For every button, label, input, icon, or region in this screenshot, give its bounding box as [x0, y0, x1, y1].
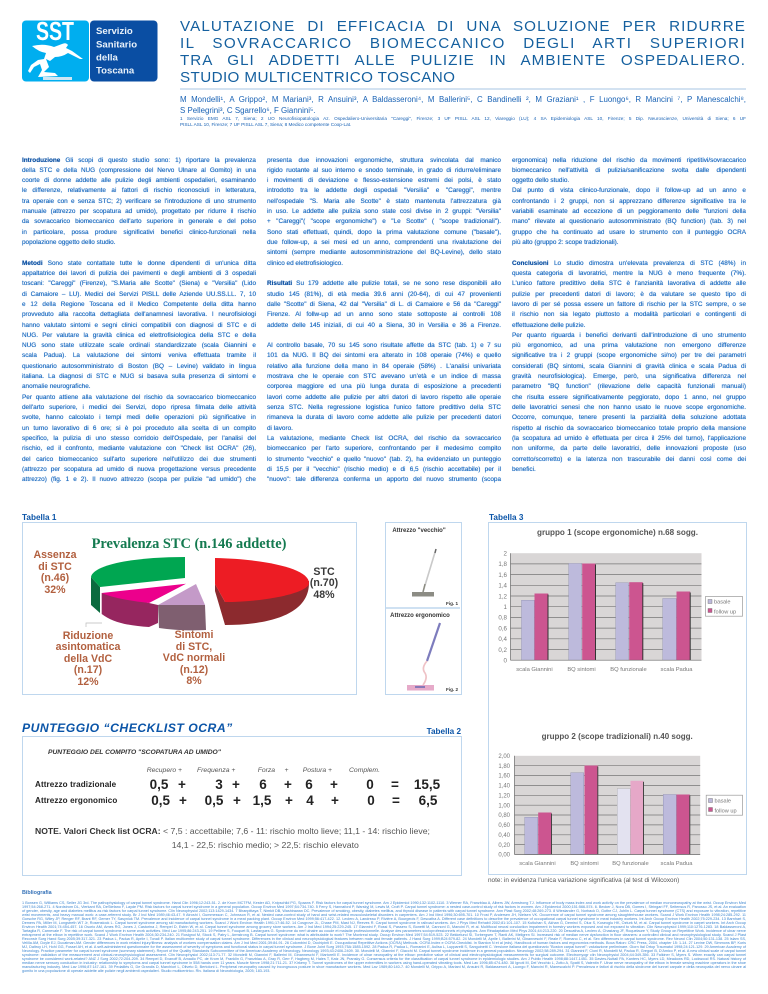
text block: bibliography: 1 Bonsen G, Williams CS, Seiler JG 3rd. The pathophysiology of carpal tunnel syndrome. Hand Clin 1996;12:243-51. 2. de Krom MCTFM, Kester AD, Knipschild PG, Spaans F. Risk factors for carpal tunnel syndrome. Am J Epidemiol 1990;132:1102-1110. 3 Werner RA, Franzblau A, Albers JW, Armstrong TJ. Influence of body mass index and work activity on the prevalence of median mononeuropathy at the wrist. Occup Environ Med 1997;54:268-271. 4 Nordstrom DL, Vierkant RA, DeStefano F, Layde PM. Risk factors for carpal tunnel syndrome in a general population. Occup Environ Med 1997;54:734-740. 5 Ferry S, Hannaford P, Warskyj M, Lewis M, Croft P. Carpal tunnel syndrome: a nested case-control study of risk factors in women. Am J Epidemiol 2000;151:566-574. 6. Becker J, Nora DB, Gomes I, Stringari FF, Seitensus R, Panosso JS, et al. An evaluation of gender, obesity, age and diabetes mellitus as risk factors for carpal tunnel syndrome. Clin Neurophysiol 2002;113:1429-1434. 7 Bhanpittaya T, Nimkit DB, Washirawan DC. Prevalence of smoking, obesity, diabetes mellitus, and thyroid disease in patients with carpal tunnel syndrome. Ann Plast Surg 2002;48:269-273. 8 Wieslander G, Norback D, Gothe CJ, Juhlin L. Carpal tunnel syndrome (CTS) and exposure to vibration, repetitive wrist movements, and heavy manual work: a case-referent study. Br J Ind Med 1989;46:43-47. 9 Atroshi I, Gummesson C, Johnsson R, et al. Nested case-control study of hand and wrist-related musculoskeletal disorders in carpenters. Am J Ind Med 1996;30:695-701. 10 Frost P, Andersen JH, Nielsen VK. Occurrence of carpal tunnel syndrome among slaughterhouse workers. Scand J Work Environ Health 1998;24:285-292. 11 Gorsche RG, Wiley JP, Renger RF, Brant RF, Gemer TY, Sasyniuk TM. Prevalence and incidence of carpal tunnel syndrome in a meat packing plant. Occup Environ Med 1999;56:417-422. 12. Leclerc A, Landreau P, Rivière A, Bourgeois F, Descatha A. Different case definitions to describe the prevalence of occupational carpal tunnel syndrome in meat industry workers. Int Arch Occup Environ Health 2002;75:229-234. 13 Barnhart S, Demers PA, Miller M, Longstreth WT Jr, Rosenstock L. Carpal tunnel syndrome among ski manufacturing workers. Scand J Work Environ Health 1991;17:46-52. 14 Cosgrove JL, Chase PM, Mast NJ, Reeves R. Carpal tunnel syndrome in railroad workers. Am J Phys Med Rehabil 2002;81:101-107. 15 Kutluhan S, Akhan G, Demirci S, Oluz S, Koseoglu HK, Ozturk M, et al. Carpal tunnel syndrome in carpet workers. Int Arch Occup Environ Health 2001;74:454-457. 16 Osorio AM, Ames RG, Jones J, Castorina J, Rempel D, Estrin W, et al. Carpal tunnel syndrome among grocery store workers. Am J Ind Med 1994;25:229-245. 17 Giannini F, Rossi S, Passero S, Bonetti M, Cannoni G, Mancini R, et al. Multifocal neural conduction impairment in forestry workers exposed and not exposed to vibration. Clin Neurophysiol 1999;110:1276-1283. 18 Baldasseroni A, Tartaglia R, Carnevale F. The risk of carpal tunnel syndrome in some work activities. Med Lav 1995;86:243-251. 19 Pelliere S, Fouquet B, Lasfargues G. Syndrome du nerf ulnaire au coude et maladie professionnelle. Analyse des parametres socioprofessionnels et physiques. Ann Réadaptation Méd Phys 2001;44:213-220. 20 Descatha A, Leclerc A, Chastang JF, Roquelaure Y, Study Group on Repetitive Work. Incidence of ulnar nerve entrapment at the elbow in repetitive work. Scand J Work Environ Health 2004;30:234-240. 21 Rosignol M, Stock S, Patry L, Armstrong B. Carpal tunnel syndrome: what is attributable to work? The Montreal study. Occup Environ Med 1997;54:519-523. 22 Bekkelund SI, Torbergsen T, Ranti AK, Mellgren SI. Increased risk of median nerve dysfunction in floor cleaners: a controlled clinical and neurophysiological study. Scand J Plast Reconstr Surg Hand Surg 2005;39:317-321. 23 Padua L, Padua R, Aprile I, Tonali P. Italian multicentre study of carpal tunnel syndrome. Differences in the clinical and neurophysiological features between male and female patie — [22, 901, 746, 973]
chart: gruppo 2: 1,60 — [498, 774, 511, 780]
text column 2: risultati: due follow-up, a sei mesi ed un anno, comprendenti una rivalutazione dei — [267, 239, 501, 246]
table content: OCRA scores: 1,5 — [253, 793, 271, 808]
text column 1: introduzione e metodi: le differenze, relativamente ai fattori di rischio riconosciuti in letteratura, — [22, 187, 256, 194]
caption: ergonomic tool: Attrezzo ergonomico — [390, 613, 450, 619]
chart: gruppo 2: 1,40 — [498, 784, 511, 790]
pie label: riduzione: asintomatica — [56, 641, 120, 653]
legend — [706, 795, 742, 815]
text column 2: risultati: 101 da NUG. Il BQ dei sintomi era alterato in 108 operaie (74%) e quello — [267, 352, 501, 359]
text column 3: conclusioni: più alto (gruppo 2: scope tradizionali). — [512, 239, 619, 246]
panel: Tabella 1 pie chart — [22, 522, 357, 695]
text column 3: conclusioni: variabili esaminate ad eccezione di un peggioramento delle "funzioni della — [512, 208, 746, 215]
table content: OCRA scores: Forza — [258, 767, 275, 774]
title: STUDIO MULTICENTRICO TOSCANO — [180, 68, 455, 86]
chart: gruppo 2: BQ funzionale — [612, 861, 649, 867]
pie label: riduzione — [56, 630, 120, 688]
text column 3: conclusioni: Occorre, comunque, tenere presenti la parzialità della soluzione adottata — [512, 414, 746, 421]
text column 2: risultati: "nuovo": tale differenza conferma un apporto del nuovo strumento (scopa — [267, 476, 501, 483]
table content: OCRA scores: 3 — [215, 777, 223, 792]
divider and mop drawings — [386, 548, 460, 690]
authors: PISLL ASL 10, Firenze; 7 UF PISLL ASL 7, Siena; 8 Medico competente Coop-Lat. — [180, 122, 351, 127]
text column 3: conclusioni: considerati (BQ sintomi, scala Giannini di gravità clinica e scala Padua di — [512, 363, 746, 370]
text column 1: introduzione e metodi: anomalie neurografiche. — [22, 383, 91, 390]
chart: gruppo 1: 1,6 — [498, 572, 508, 579]
text column 1: introduzione e metodi: (attrezzo per scopatura ad umido di nuova progettazione versus precedente — [22, 466, 256, 473]
text column 2: risultati: La valutazione, mediante Check list OCRA, del rischio da sovraccarico — [267, 435, 501, 442]
chart: gruppo 2: 0,00 — [498, 853, 511, 859]
text column 1: introduzione e metodi: rischio, ed il confronto, mediante valutazione con "Check list OCRA" (26), — [22, 445, 256, 452]
chart: gruppo 2: BQ sintomi — [570, 861, 599, 867]
text column 2: risultati: addette delle 145 iniziali, di cui 40 a Siena, 30 in Versilia e 36 a Firenze. — [267, 322, 501, 328]
text column 3: conclusioni: Conclusioni Lo studio dimostra un'elevata prevalenza di STC (48%) in — [512, 260, 746, 267]
legend: basale — [714, 600, 730, 606]
text column 2: risultati: relativo alla funzione della mano in 84 operaie (58%) . L'analisi univariata — [267, 363, 501, 370]
heading: Punteggio Checklist OCRA: PUNTEGGIO “CHECKLIST OCRA” — [22, 721, 233, 735]
text column 2: risultati: di 15,5 per il "vecchio" (rischio medio) e di 6,5 (rischio accettabile) per il — [267, 466, 501, 473]
text column 3: conclusioni: questa categoria di lavoratrici, mentre la NUG è meno frequente (7%). — [512, 270, 746, 277]
label: Tabella 3: Tabella 3 — [489, 513, 523, 522]
title: TRA GLI ADDETTI ALLE PULIZIE IN AMBIENTE OSPEDALIERO. — [180, 52, 746, 69]
text column 1: introduzione e metodi: dell'arto superiore, i medici dei Servizi, dopo ripresa filmata delle attività — [22, 404, 256, 411]
pie label: assenza: 32% — [44, 584, 66, 596]
text column 2: risultati: mostrava che le operaie con STC avevano un'età e un indice di massa — [267, 373, 501, 380]
text column 1: introduzione e metodi: attrezzo) (fig. 1 e 2). Il nuovo attrezzo (scopa per pulizie "ad umido") che — [22, 476, 256, 483]
table content: OCRA scores: + — [179, 793, 187, 808]
title: IL SOVRACCARICO BIOMECCANICO DEGLI ARTI SUPERIORI — [180, 35, 746, 52]
table content: OCRA scores: = — [392, 793, 400, 808]
pie label: riduzione: Riduzione — [63, 630, 113, 642]
pie label: sintomi: (n.12) — [180, 664, 208, 676]
text column 3: conclusioni: mano" rilevate al questionario autosomministrato (BQ function) (tab. 3) nel — [512, 218, 746, 225]
text column 1: introduzione e metodi: provveduto alla raccolta dettagliata dell'anamnesi lavorativa. I neurofisiologi — [22, 311, 256, 318]
pie label: STC: STC — [313, 566, 335, 578]
text column 1: introduzione e metodi: da sovraccarico biomeccanico dell'arto superiore in generale e del polso — [22, 218, 256, 225]
text column 1: introduzione e metodi: hanno valutato sintomi e segni clinici compatibili con diagnosi di STC e di — [22, 322, 256, 328]
text column 3: conclusioni: biomeccanico nell'attività di pulizia/sanificazione svolta dalle dipendenti — [512, 167, 746, 174]
text column 2: risultati — [266, 156, 502, 483]
chart: gruppo 1: BQ funzionale — [610, 667, 647, 673]
chart: gruppo 1: scala Padua — [661, 667, 693, 673]
chart: gruppo 2: 0,40 — [498, 833, 511, 839]
authors — [180, 95, 746, 127]
text column 3: conclusioni: benefici. — [512, 466, 536, 473]
text column 1: introduzione e metodi: italiana. La diagnosi di STC e NUG si basava sulla presenza di sintomi e — [22, 373, 256, 380]
chart: gruppo 2: 1,00 — [498, 803, 511, 809]
chart: gruppo 2: 0,60 — [498, 823, 511, 829]
pie label: sintomi — [162, 629, 225, 687]
table content: OCRA scores: 0,5 — [150, 777, 168, 792]
authors: S Pellegrini³, C Sgarrello⁶, F Giannini⁵. — [180, 106, 315, 115]
logo: Servizio Sanitario della Toscana: Toscana — [96, 66, 135, 76]
text column 1: introduzione e metodi: Per quanto attiene alla valutazione del rischio da sovraccarico biomeccanico — [22, 394, 256, 401]
pie label: assenza — [34, 549, 77, 596]
text column 3: conclusioni: non uniforme, da parte delle lavoratrici, delle innovazioni proposte (uso — [512, 445, 746, 452]
table content: OCRA scores: 6 — [305, 777, 313, 792]
table content: OCRA scores: 0,5 — [205, 793, 223, 808]
pie label: sintomi: di STC, — [176, 640, 212, 652]
text column 1: introduzione e metodi: scala Padua). La valutazione dei sintomi veniva effettuata tramite il — [22, 352, 256, 359]
table content: OCRA scores: + — [284, 767, 288, 774]
table content: OCRA scores: 0 — [366, 777, 374, 792]
pie label: STC: (n.70) — [310, 577, 338, 589]
text column 2: risultati: presenta due innovazioni ergonomiche, struttura svincolata dal manico — [267, 156, 501, 164]
legend: basale — [714, 798, 731, 804]
text column 2: risultati: + "Careggi"( "scope ergonomiche") e "Le Scotte" ( "scope tradizionali"). — [267, 218, 501, 225]
text column 1: introduzione e metodi: Metodi Sono state contattate tutte le donne dipendenti di un'unica ditta — [22, 260, 256, 267]
text column 3: conclusioni: parametro "BQ function" (rilevazione delle capacità funzionali manuali) — [512, 383, 746, 390]
text column 3: conclusioni: ergonomica) nella riduzione del rischio da movimenti ripetitivi/sovraccarico — [512, 156, 746, 164]
chart: gruppo 1 — [498, 528, 742, 673]
caption: old tool: Attrezzo "vecchio" — [392, 528, 446, 534]
note: valori check list OCRA: NOTE. Valori Check list OCRA: < 7,5 : accettabile; 7,6 - 11: rischio molto lieve; 11,1 - 14: rischio lieve; — [35, 826, 430, 836]
logo: Servizio Sanitario della Toscana — [22, 20, 158, 82]
text column 2: risultati: di lavoro. — [267, 425, 293, 432]
logo: Servizio Sanitario della Toscana: Servizio — [96, 26, 133, 37]
authors: M Mondelli¹, A Grippo², M Mariani³, R Ansuini³, A Baldasseroni⁴, M Ballerini⁵, C Bandinelli ², M Graziani¹ , F Luongo⁶, R Mancini ⁷, P Manescalchi⁸, — [180, 95, 746, 104]
figure number 2: Fig. 2 — [446, 687, 458, 692]
text column 2: risultati: dalle "Scotte" di Siena, 42 dal "Versilia" di L. di Camaiore e 56 da "Careggi" — [267, 301, 501, 308]
table content: OCRA scores: + — [331, 793, 339, 808]
chart: gruppo 2: scala Padua — [661, 861, 693, 867]
text column 2: risultati: sintomi (sempre mediante autosomministrazione del BQ-Levine), dello stato — [267, 249, 501, 256]
text column 3: conclusioni — [512, 156, 746, 473]
chart: gruppo 2: 1,80 — [498, 764, 511, 770]
chart: gruppo 2: 0,20 — [498, 843, 511, 849]
title — [180, 18, 746, 86]
table content: OCRA scores: Frequenza + — [197, 767, 235, 774]
pie label: riduzione: 12% — [77, 676, 99, 688]
heading: Bibliografia: Bibliografia — [22, 890, 52, 896]
text column 1: introduzione e metodi: NUG. Per valutare la gravità clinica ed elettrofisiologica della STC e della — [22, 332, 256, 339]
text column 1: introduzione e metodi: svolte, hanno calcolato i tempi medi delle operazioni più significative in — [22, 414, 256, 421]
pie slice: assenza di STC — [91, 557, 185, 613]
title: VALUTAZIONE DI EFFICACIA DI UNA SOLUZIONE PER RIDURRE — [180, 18, 746, 35]
table content: OCRA scores: 15,5 — [414, 777, 440, 792]
text column 2: risultati: lavori come addette alle pulizie per altri datori di lavoro rispetto alle operaie — [267, 394, 501, 401]
text column 1: introduzione e metodi: specifico, la pulizia di uno stesso corridoio dell'Ospedale, per l'analisi del — [22, 435, 256, 442]
note under Tabella 3: note: in evidenza l'unica variazione significativa (al test di Wilcoxon) — [488, 877, 679, 884]
icon: ergonomic mop — [407, 623, 440, 690]
row: attrezzo tradizionale — [35, 777, 440, 792]
text column 2: risultati: corporea maggiore ed una più lunga durata di esposizione a precedenti — [267, 383, 501, 390]
text column 3: conclusioni: (la scopatura ad umido è effettuata per circa il 25% del turno), l'applicazione — [512, 435, 746, 442]
chart: gruppo 2: gruppo 2 (scope tradizionali) n.40 sogg. — [542, 732, 693, 741]
row: attrezzo ergonomico — [35, 793, 437, 808]
icon: old mop — [412, 549, 436, 596]
panel: Tabella 3 bar charts — [488, 522, 747, 875]
text column 2: risultati: Risultati Su 179 addette alle pulizie totali, se ne sono rese disponibili allo — [267, 280, 501, 287]
text column 3: conclusioni: che risulta essere significativamente peggiorato, dopo 1 anno, nel gruppo — [512, 394, 746, 401]
chart: gruppo 1: 1 — [504, 604, 508, 611]
legend — [706, 596, 742, 616]
text column 2: risultati: Firenze. Al follw-up ad un anno sono state sottoposte ai controlli 108 — [267, 311, 501, 318]
table content: OCRA scores: + — [330, 777, 338, 792]
legend: follow up — [714, 808, 737, 814]
table content: OCRA scores: + — [285, 793, 293, 808]
text column 3: conclusioni: gruppo che ha continuato ad usare lo strumento con il punteggio OCRA — [512, 229, 746, 236]
chart: gruppo 1: 1,8 — [498, 561, 508, 568]
text column 2: risultati: in uso. Le addette alle pulizia sono state così divise in 2 gruppi: "Versilia" — [267, 208, 501, 215]
text column 3: conclusioni: gravità neurofisiologica). Emerge, però, una significativa differenza nel — [512, 373, 746, 380]
text column 2: risultati: rigido ruotante al suo interno e snodo terminale, in grado di ridurre/eliminare — [267, 167, 501, 174]
table content: OCRA scores: + — [284, 777, 292, 792]
note: valori check list OCRA: 14,1 - 22,5: rischio medio; > 22,5: rischio elevato — [172, 840, 359, 850]
text column 2: risultati: Sono stati effettuati, quindi, dopo la prima valutazione comune ("basale"), — [267, 229, 501, 236]
text column 3: conclusioni: rispetto al rischio da sovraccarico biomeccanico totale proprio della mansione — [512, 425, 746, 432]
text column 3: conclusioni: corretto/scorretto) e la latenza non trascurabile dei danni così come dei — [512, 456, 746, 463]
text column 1: introduzione e metodi: popolazione oggetto dello studio. — [22, 239, 115, 246]
pie label: STC: 48% — [313, 588, 335, 600]
chart: gruppo 1: 0,4 — [498, 636, 508, 643]
table content: OCRA scores: Attrezzo tradizionale — [35, 780, 116, 789]
table content: OCRA scores: 6 — [259, 777, 267, 792]
chart: gruppo 1: BQ sintomi — [567, 667, 596, 673]
text column 2: risultati: i movimenti di deviazione e flesso-estensione estremi dei polsi, è stato — [267, 177, 501, 184]
chart: gruppo 1: 2 — [504, 550, 508, 558]
text column 1: introduzione e metodi: del carico biomeccanico sull'arto superiore nell'utilizzo dei due strumenti — [22, 456, 256, 463]
label: Tabella 2: Tabella 2 — [427, 727, 461, 736]
chart: gruppo 1: 0,2 — [498, 647, 508, 654]
text column 2: risultati: Al controllo basale, 70 su 145 sono risultate affette da STC (tab. 1) e 7 su — [267, 342, 501, 349]
text column 3: conclusioni: confrontando i 2 gruppi, non si apprezzano differenze significative tra le — [512, 198, 746, 205]
text column 1: introduzione e metodi: tra operaie con e senza STC; 2) verificare se l'introduzione di uno strumento — [22, 198, 256, 205]
table content: OCRA scores: 0 — [367, 793, 375, 808]
table content: OCRA scores: Attrezzo ergonomico — [35, 796, 117, 805]
table content: OCRA scores: Complem. — [349, 767, 380, 774]
text column 2: risultati: lo strumento "vecchio" e quello "nuovo" (tab. 2), ha evidenziato un punteggio — [267, 456, 501, 463]
text column 1: introduzione e metodi: questionario autosomministrato di Boston (BQ – Levine) validato in lingua — [22, 363, 256, 370]
text column 3: conclusioni: effettuazione delle pulizie. — [512, 322, 585, 328]
label: Tabella 1: Tabella 1 — [22, 513, 56, 522]
3D pie chart — [86, 557, 309, 630]
column headers — [147, 767, 380, 774]
text column 1: introduzione e metodi: toscani: "Careggi" (Firenze), "S.Maria alle Scotte" (Siena) e "Versilia" (Lido — [22, 280, 256, 287]
text column 1: introduzione e metodi — [22, 156, 256, 483]
table content: OCRA scores: Postura + — [303, 767, 332, 774]
text column 3: conclusioni: Per quanto riguarda i benefici derivanti dall'introduzione di uno strumento — [512, 332, 746, 339]
text column 3: conclusioni: pulizie per precedenti datori di lavoro; è da valutare se questo tipo di — [512, 291, 746, 298]
text column 2: risultati: clinico ed elettrofisiologico. — [267, 260, 343, 267]
pie label: assenza: di STC — [38, 560, 72, 572]
text column 3: conclusioni: L'unico fattore predittivo della STC è l'anzianità lavorativa di addette alle — [512, 280, 746, 287]
chart: gruppo 2: 0,80 — [498, 813, 511, 819]
text column 1: introduzione e metodi: manuale (attrezzo per scopatura ad umido), progettato per ridurre il rischio — [22, 208, 256, 215]
panel: Tabella 2 scores — [22, 736, 462, 876]
text column 3: conclusioni: delle lavoratrici senesi che non hanno usato le nuove scope ergonomiche. — [512, 404, 746, 411]
panel: figures of the two tools — [385, 522, 462, 695]
table content: OCRA scores — [35, 749, 440, 850]
table content: OCRA scores: 0,5 — [151, 793, 170, 808]
text column 3: conclusioni: significative tra i 2 gruppi (scope ergonomiche si/no) per tre dei parametri — [512, 352, 746, 359]
chart: gruppo 1: 0 — [504, 658, 508, 664]
table subtitle: PUNTEGGIO DEL COMPITO "SCOPATURA AD UMIDO" — [48, 749, 221, 756]
chart: gruppo 1: 0,6 — [498, 625, 508, 632]
pie label: sintomi: VdC normali — [163, 652, 225, 664]
text column 2: risultati: rimaneva la durata di lavoro come addette alle pulizie per precedenti datori — [267, 414, 501, 421]
table content: OCRA scores: + — [233, 793, 241, 808]
table content: OCRA scores: = — [391, 777, 399, 792]
text column 3: conclusioni: più ergonomico, ad una prima valutazione non emergono differenze — [512, 342, 746, 349]
chart: gruppo 2: 2,00 — [498, 754, 511, 760]
text column 1: introduzione e metodi: e 12 della Regione Toscana ed il Medico Competente della ditta hanno — [22, 301, 256, 308]
logo: Servizio Sanitario della Toscana: Sanitario — [96, 40, 137, 50]
text column 3: conclusioni: Dal punto di vista clinico-funzionale, dopo il follow-up ad un anno e — [512, 187, 746, 194]
figure number 1: Fig. 1 — [446, 601, 458, 606]
pie label: STC — [310, 566, 338, 600]
pie slice: sintomi di STC — [158, 584, 206, 630]
table content: OCRA scores: + — [178, 777, 186, 792]
text column 2: risultati: studio 145 (81%), di età media 39.6 anni (20-64), di cui 47 provenienti — [267, 291, 501, 298]
pie label: sintomi: 8% — [186, 675, 202, 687]
table content: OCRA scores: 4 — [306, 793, 314, 808]
table content: OCRA scores: Recupero + — [147, 767, 182, 774]
text column 2: risultati: nell'ospedale "S. Maria alle Scotte" è stato mantenuta l'attrezzatura già — [267, 198, 501, 205]
pie label: assenza: Assenza — [34, 549, 76, 561]
text column 3: conclusioni: oggetto dello studio. — [512, 177, 569, 184]
table content: OCRA scores: 6,5 — [419, 793, 437, 808]
chart: gruppo 1: gruppo 1 (scope ergonomiche) n.68 sogg. — [537, 528, 698, 537]
chart: gruppo 1: 1,2 — [498, 593, 508, 600]
pie label: riduzione: della VdC — [64, 652, 112, 664]
chart: gruppo 2 — [498, 732, 742, 867]
chart: gruppo 2: 1,20 — [498, 794, 511, 800]
text column 2: risultati: introdotto tra le addette degli ospedali "Versilia" e "Careggi", mentre — [267, 187, 501, 194]
text column 1: introduzione e metodi: appaltatrice dei lavori di pulizia dei pavimenti e degli ambienti di 3 ospedali — [22, 270, 256, 277]
text column 1: introduzione e metodi: in particolare, possa produre significativi benefici clinico-funzionali nella — [22, 229, 256, 236]
text column 3: conclusioni: il rischio non sia legato piuttosto a modalità particolari e contingenti di — [512, 311, 746, 318]
text column 1: introduzione e metodi: un turno lavorativo di 6 ore; si è poi proceduto alla scelta di un compito — [22, 425, 256, 432]
chart: gruppo 1: 0,8 — [498, 615, 508, 622]
text column 3: conclusioni: lavoro di per sé possa essere un fattore di rischio per la STC sempre, o se — [512, 301, 746, 308]
text column 1: introduzione e metodi: di Camaiore – LU). Medici dei Servizi PISLL delle Aziende UU.SS.LL. 7, 10 — [22, 291, 256, 298]
pie chart heading: Prevalenza STC (n.146 addette) — [92, 536, 286, 552]
chart: gruppo 1: 1,4 — [498, 583, 508, 590]
logo: Servizio Sanitario della Toscana: della — [96, 52, 119, 64]
text column 2: risultati: senza STC. Nella regressione logistica l'unico fattore predittivo della STC — [267, 404, 501, 411]
note: valori check list OCRA — [35, 826, 430, 850]
text column 1: introduzione e metodi: della STC e della NUG (compressione del Nervo Ulnare al Gomito) in una — [22, 167, 256, 174]
authors: 1 Servizio EMG ASL 7, Siena; 2 UO Neurofisiopatologia Az. Ospedaliero-Universitaria "Careggi", Firenze; 3 UF PISLL ASL 12, Viareggio (LU); 4 SA Epidemiologia ASL 10, Firenze; 5 Dip. Neuroscienze, Università di Siena; 6 UF — [180, 116, 746, 120]
legend: follow up — [714, 610, 736, 616]
text column 2: risultati: biomeccanico per l'arto superiore, confrontando per il medesimo compito — [267, 445, 501, 452]
pie label: sintomi: Sintomi — [175, 629, 213, 641]
pie label: assenza: (n.46) — [41, 572, 69, 584]
text column 1: introduzione e metodi: coorte di donne addette alle pulizie degli ambienti ospedalieri, esaminando — [22, 177, 256, 184]
text column 1: introduzione e metodi: NUG sono state utilizzate scale ordinali standardizzate (scala Giannini e — [22, 342, 256, 349]
table content: OCRA scores: + — [232, 777, 240, 792]
text column 1: introduzione e metodi: Introduzione Gli scopi di questo studio sono: 1) riportare la prevalenza — [22, 156, 256, 164]
chart: gruppo 1: scala Giannini — [516, 667, 553, 673]
pie slice: riduzione asintomatica — [102, 584, 186, 627]
pie label: riduzione: (n.17) — [74, 664, 102, 676]
pie slice: STC — [215, 558, 309, 625]
chart: gruppo 2: scala Giannini — [519, 861, 556, 867]
